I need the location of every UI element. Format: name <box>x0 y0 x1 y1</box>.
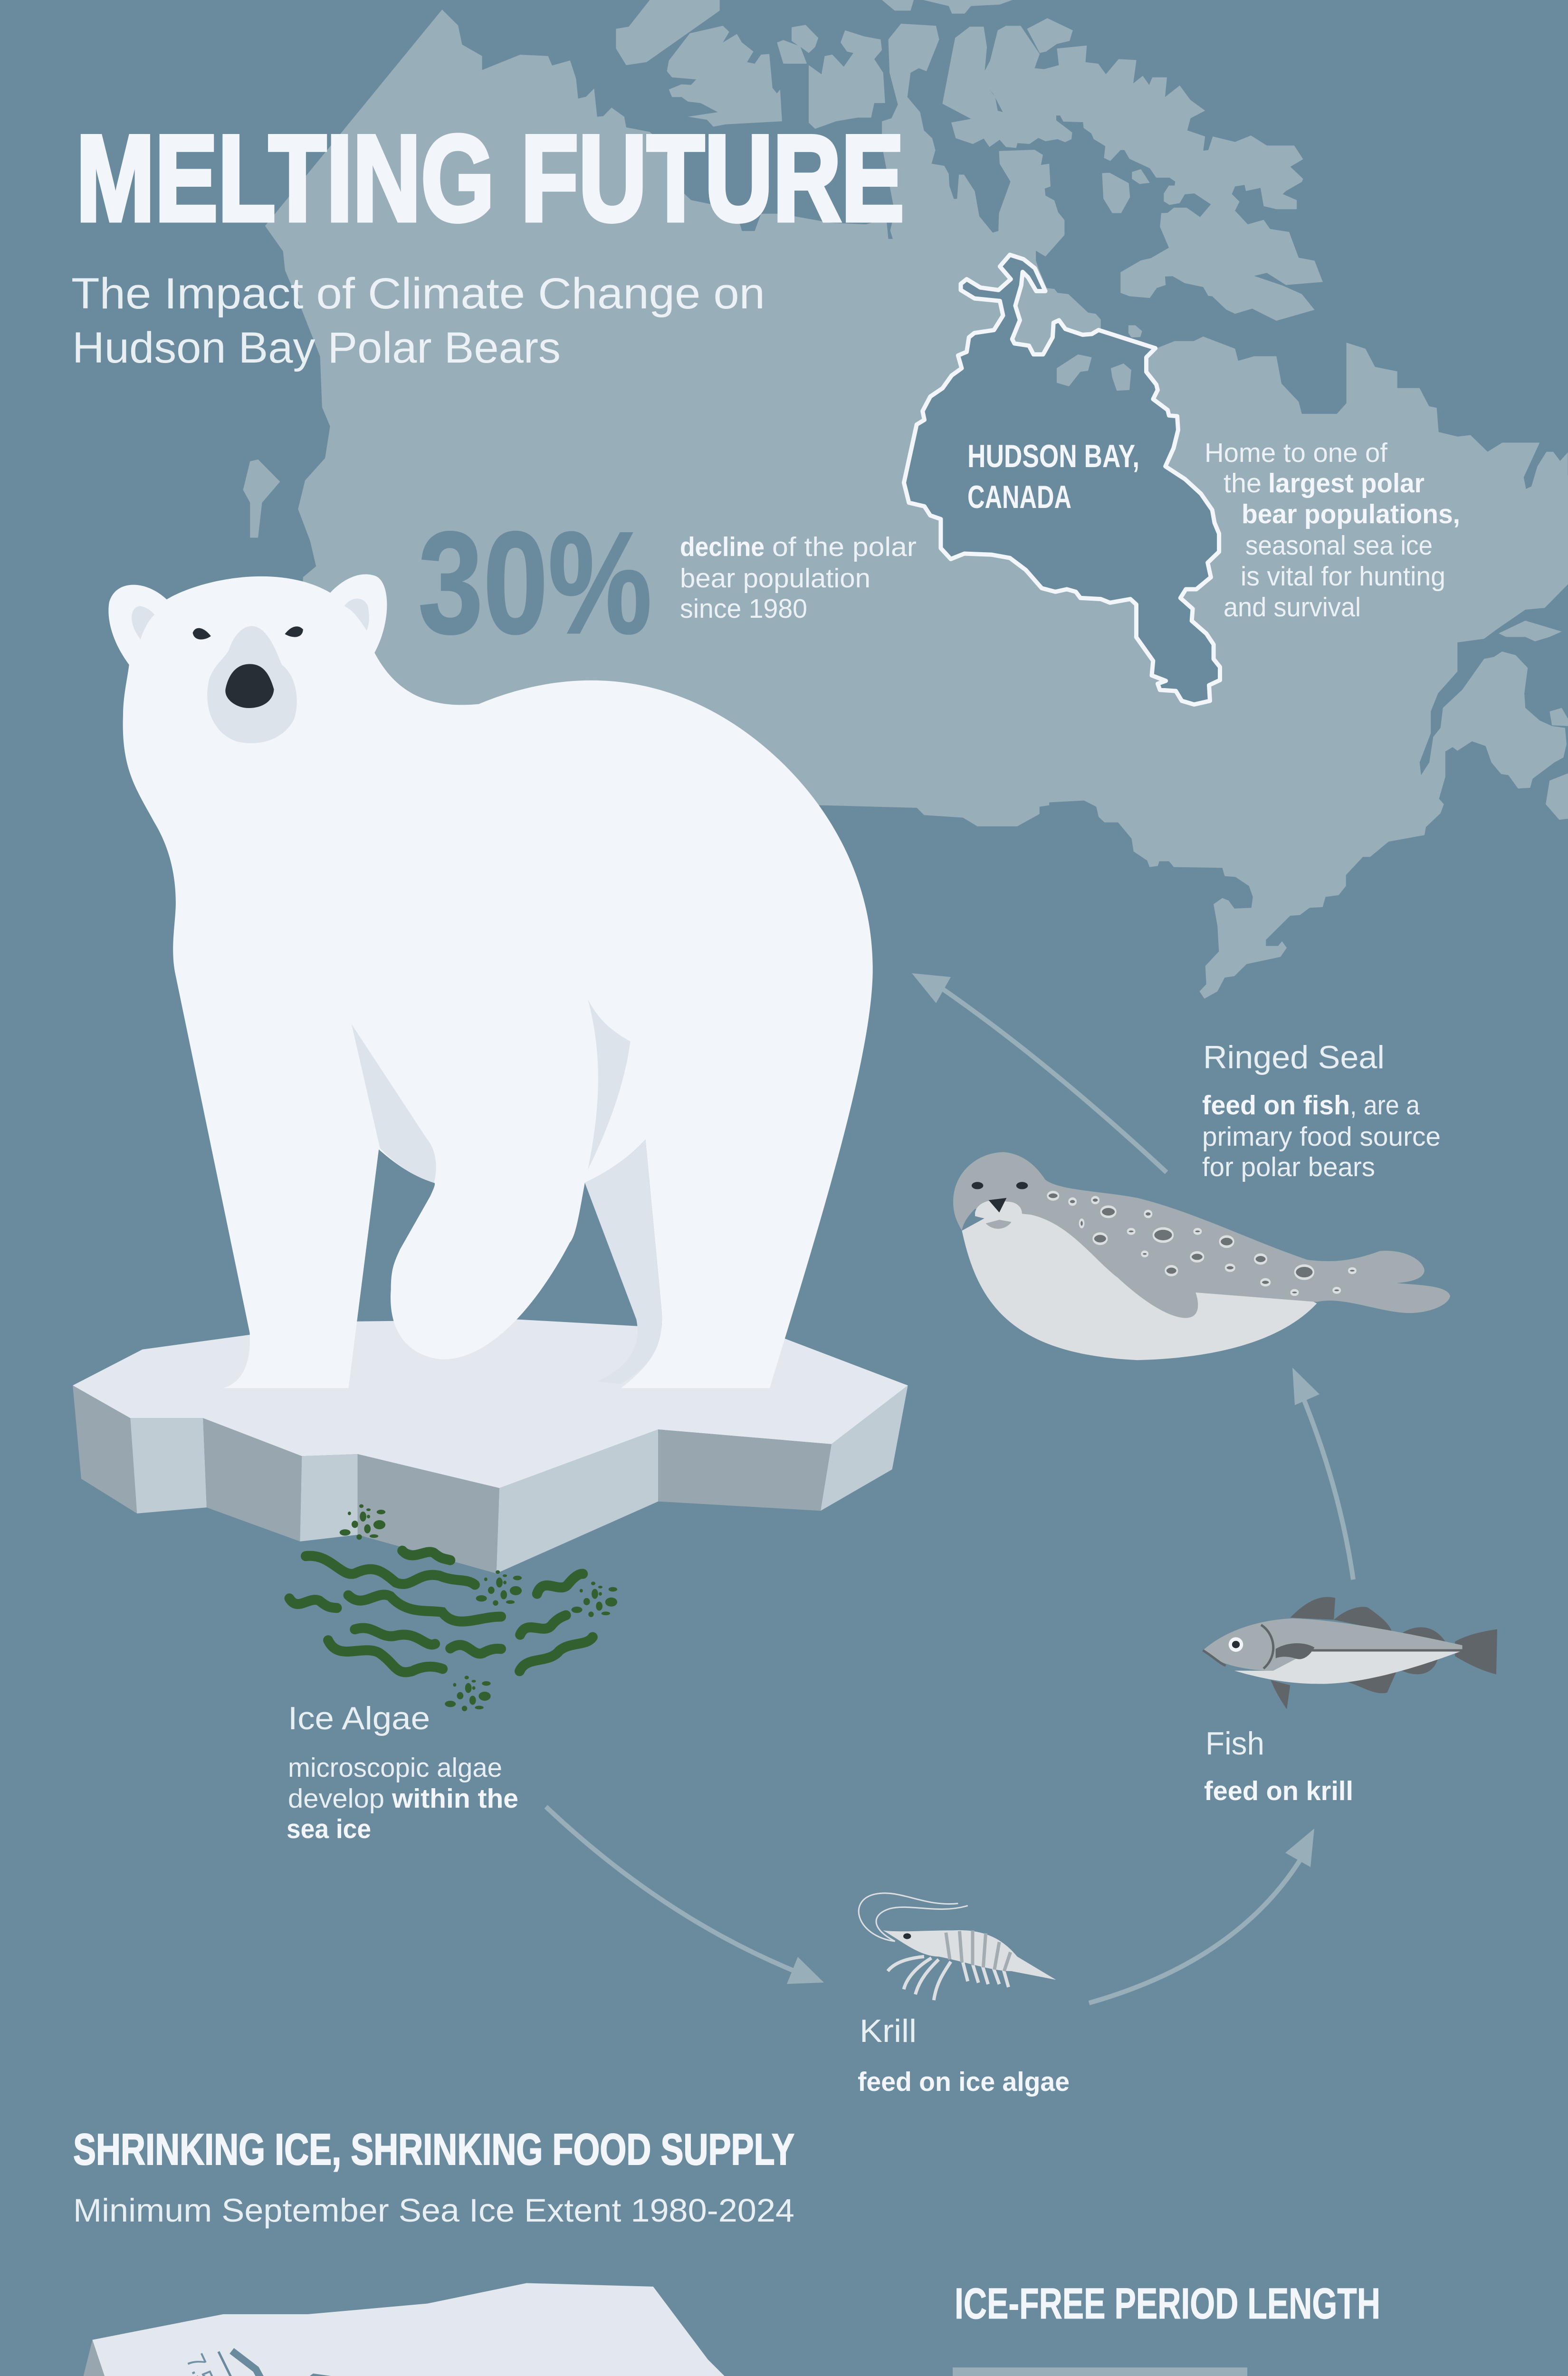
ice algae text: within the <box>392 1783 518 1814</box>
bear muzzle <box>207 626 297 743</box>
fish text <box>1204 1725 1353 1806</box>
decline text: of the polar <box>772 532 917 562</box>
bear nose <box>225 664 274 708</box>
bar 1980 <box>953 2367 1401 2376</box>
Hudson Bay description: largest polar <box>1268 468 1425 498</box>
ringed seal text: Ringed Seal <box>1203 1039 1385 1075</box>
chart axes <box>219 2352 844 2376</box>
ice floe under bear <box>73 1320 908 1573</box>
ringed seal text: for polar bears <box>1202 1152 1375 1182</box>
polar bear <box>108 574 873 1388</box>
ringed seal text: feed on fish <box>1202 1090 1350 1121</box>
Hudson Bay description: and survival <box>1224 592 1361 623</box>
map water: gulf <box>1420 584 1568 775</box>
krill <box>859 1893 1056 2000</box>
subtitle: Hudson Bay Polar Bears <box>72 324 561 372</box>
bear eyes <box>193 626 303 640</box>
sea ice extent line <box>232 2351 828 2376</box>
ice algae text: develop <box>288 1783 384 1814</box>
arrow: krill to fish <box>1089 1829 1314 2003</box>
map of Canada <box>243 0 1568 999</box>
Hudson Bay description: the <box>1224 468 1262 498</box>
krill text <box>858 2013 1070 2097</box>
seal spots <box>1048 1192 1356 1294</box>
decline text: decline <box>680 532 765 562</box>
section heading: shrinking ice: SHRINKING ICE, SHRINKING FOOD SUPPLY <box>73 2125 794 2174</box>
decline text: since 1980 <box>680 594 807 624</box>
ringed seal text: , are a <box>1350 1090 1420 1121</box>
ringed seal <box>953 1152 1450 1360</box>
subtitle: The Impact of Climate Change on <box>71 269 765 318</box>
Hudson Bay description: is vital for hunting <box>1241 561 1445 592</box>
ice algae text: Ice Algae <box>288 1700 430 1736</box>
ice algae text <box>287 1700 518 1844</box>
islands in Hudson Bay <box>1057 354 1131 391</box>
chart subtitle: Minimum September Sea Ice Extent 1980-2024 <box>73 2192 794 2229</box>
decline text <box>680 532 917 624</box>
ice algae <box>289 1504 617 1711</box>
ringed seal text <box>1202 1039 1441 1182</box>
arrow: seal to bear <box>912 973 1166 1172</box>
heading: ice-free period: ICE-FREE PERIOD LENGTH <box>955 2280 1380 2328</box>
Hudson Bay description: bear populations, <box>1242 499 1460 529</box>
Hudson Bay description <box>1205 438 1460 623</box>
ice algae text: sea ice <box>287 1814 371 1844</box>
krill text: Krill <box>860 2013 917 2049</box>
Hudson Bay label: HUDSON BAY, <box>967 438 1139 474</box>
title: MELTING FUTURE <box>76 109 904 247</box>
Hudson Bay label <box>967 438 1139 515</box>
Hudson Bay outline <box>904 255 1220 704</box>
subtitle <box>71 269 765 372</box>
bear ears <box>132 599 369 640</box>
ice algae text: microscopic algae <box>288 1753 502 1783</box>
arrow: algae to krill <box>546 1807 824 1984</box>
bear hind leg shadow <box>588 999 631 1169</box>
decline text: bear population <box>680 563 870 594</box>
arrow: fish to seal <box>1292 1368 1353 1580</box>
fish text: feed on krill <box>1204 1776 1353 1806</box>
Hudson Bay description: seasonal sea ice <box>1245 530 1433 561</box>
Hudson Bay label: CANADA <box>967 479 1071 515</box>
map water: eastern inlet <box>1524 423 1568 489</box>
fish <box>1203 1597 1497 1709</box>
bear belly shadow <box>352 1024 436 1183</box>
30% stat: 30% <box>418 501 652 664</box>
Hudson Bay description: Home to one of <box>1205 438 1387 468</box>
sea ice extent chart on ice slab <box>75 2283 899 2376</box>
krill text: feed on ice algae <box>858 2067 1070 2097</box>
fish text: Fish <box>1205 1725 1264 1762</box>
ringed seal text: primary food source <box>1202 1121 1441 1152</box>
